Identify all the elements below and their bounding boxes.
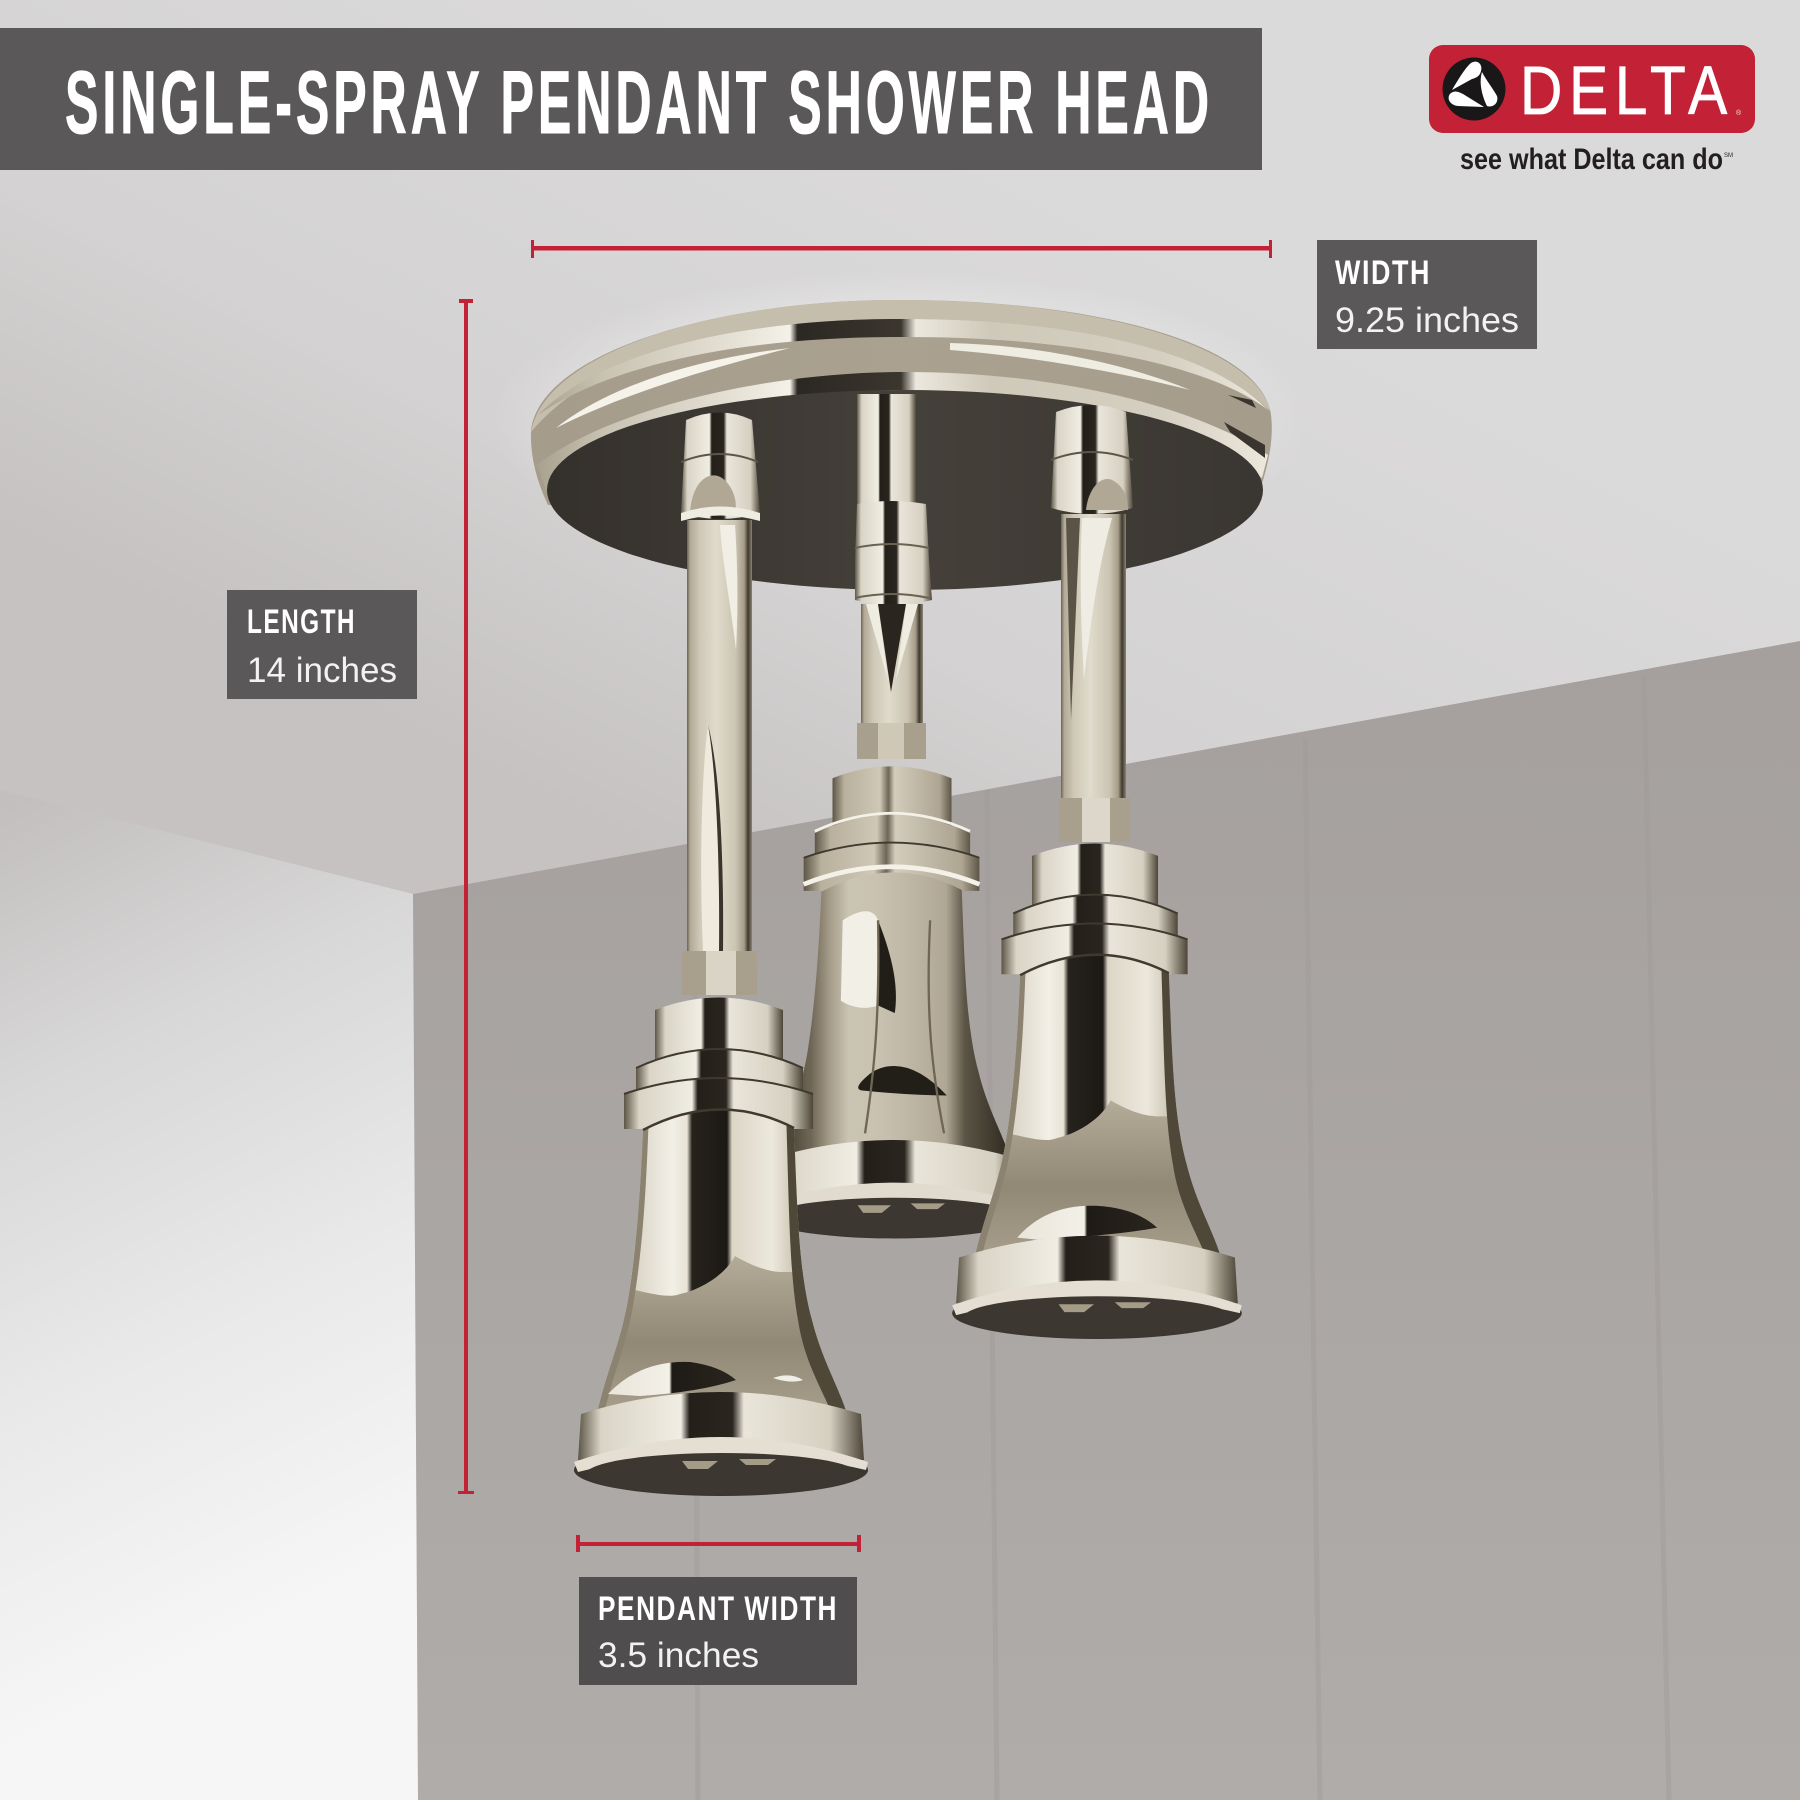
rim bbox=[757, 1189, 1031, 1238]
rim side reflections bbox=[1224, 395, 1265, 458]
step ring bbox=[804, 843, 979, 891]
callout: width bbox=[1317, 240, 1537, 349]
step ring lower bbox=[1001, 924, 1188, 974]
bell lower reflection bbox=[598, 1126, 846, 1410]
callout label: WIDTH bbox=[1335, 254, 1431, 292]
bottom band bbox=[578, 1392, 864, 1460]
callout value: 3.5 inches bbox=[598, 1636, 759, 1675]
step ring lower bbox=[624, 1078, 813, 1129]
collar bbox=[1032, 843, 1158, 906]
bell highlight blob bbox=[1017, 1206, 1157, 1240]
background: left white wall bbox=[0, 790, 418, 1800]
upper polished ring bbox=[538, 319, 1268, 415]
icon: Delta triangle emblem bbox=[1442, 58, 1506, 120]
upper pipe bbox=[857, 394, 916, 506]
pendant: left head bbox=[574, 998, 868, 1496]
pipe reflection bbox=[720, 525, 737, 650]
logo tagline: see what Delta can do bbox=[1460, 143, 1723, 176]
step ring upper bbox=[636, 1049, 803, 1100]
spray face bbox=[586, 1453, 858, 1495]
bell lower reflection bbox=[976, 971, 1220, 1253]
canopy underside bbox=[547, 390, 1263, 590]
spray face bbox=[964, 1296, 1232, 1338]
Delta logo bbox=[1429, 45, 1755, 133]
product: left arm bbox=[681, 412, 760, 995]
background: back wall with vertical panel seams bbox=[413, 641, 1800, 1800]
half-moon reflection bbox=[690, 475, 736, 513]
spray nozzles bbox=[1059, 1302, 1151, 1312]
logo wordmark: DELTA bbox=[1520, 52, 1734, 129]
pipe spindle reflection bbox=[866, 604, 918, 680]
bell bbox=[779, 872, 1011, 1161]
step ring bbox=[815, 815, 970, 863]
callout: pendant width bbox=[579, 1577, 857, 1685]
bottom band bbox=[956, 1236, 1238, 1303]
dimension arrow: width bbox=[531, 240, 1272, 258]
background: ceiling glow around canopy bbox=[490, 270, 1310, 570]
upper collar bbox=[681, 412, 760, 519]
pipe bbox=[687, 520, 752, 952]
product: canopy bbox=[531, 300, 1272, 590]
registered mark: ® bbox=[1736, 109, 1742, 117]
bell highlight blob bbox=[608, 1362, 736, 1396]
upper collar bbox=[1051, 405, 1133, 514]
step ring upper bbox=[1013, 895, 1178, 945]
spray nozzles bbox=[682, 1459, 776, 1469]
half-moon reflection bbox=[1086, 479, 1128, 510]
bell reflections bbox=[841, 911, 878, 1008]
lower pipe bbox=[861, 604, 923, 724]
hex nut bbox=[1059, 798, 1130, 842]
pendant: center head bbox=[757, 766, 1031, 1238]
hex nut bbox=[682, 951, 757, 995]
canopy rim silhouette bbox=[531, 300, 1272, 505]
upper thin band bbox=[531, 300, 1271, 432]
hex nut bbox=[857, 723, 926, 759]
bottom band bbox=[761, 1140, 1027, 1204]
collar bbox=[832, 766, 952, 826]
product: center arm bbox=[855, 394, 932, 759]
callout value: 9.25 inches bbox=[1335, 301, 1519, 340]
arm collar bbox=[855, 501, 932, 605]
dimension arrow: pendant width bbox=[576, 1535, 861, 1552]
callout label: LENGTH bbox=[247, 603, 356, 641]
spray face bbox=[768, 1198, 1021, 1238]
pipe reflection bbox=[1081, 518, 1112, 680]
bell body bbox=[597, 1109, 847, 1414]
bottom rim bbox=[952, 1287, 1242, 1339]
collar bbox=[655, 998, 783, 1060]
background: ceiling bbox=[0, 0, 1800, 900]
product: right arm bbox=[1051, 405, 1133, 842]
callout label: PENDANT WIDTH bbox=[598, 1590, 838, 1628]
pendant: right head bbox=[952, 843, 1242, 1339]
title banner bbox=[0, 28, 1262, 170]
pipe bbox=[1061, 514, 1126, 800]
lower polished ring bbox=[537, 372, 1268, 490]
bell top seam bbox=[1020, 955, 1169, 975]
logo tagline: SM bbox=[1724, 153, 1733, 159]
bell body bbox=[975, 955, 1221, 1257]
band highlight bbox=[556, 348, 790, 428]
bottom rim bbox=[574, 1444, 868, 1496]
callout: length bbox=[227, 590, 417, 699]
dimension arrow: length bbox=[458, 299, 474, 1494]
callout value: 14 inches bbox=[247, 651, 397, 690]
bell top seam bbox=[643, 1109, 794, 1130]
